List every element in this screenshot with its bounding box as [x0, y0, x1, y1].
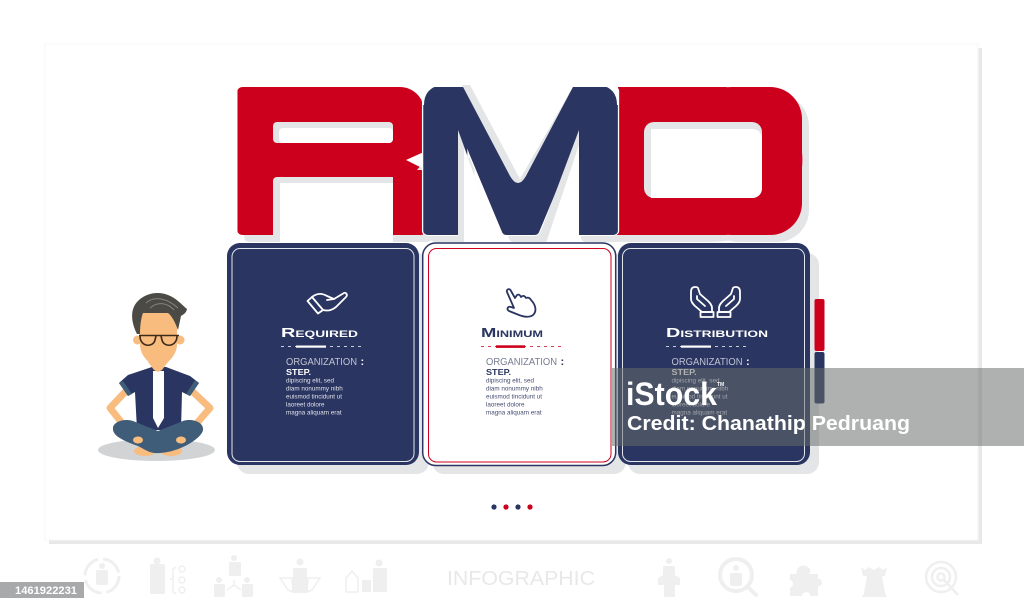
image id tag: 1461922231 — [15, 585, 77, 597]
title drop shadow: R — [231, 54, 432, 281]
watermark band — [612, 368, 1024, 446]
text block: diam nonummy nibh — [286, 386, 343, 392]
text block: STEP. — [286, 368, 311, 377]
icon: two hands — [691, 287, 740, 317]
letter R: R — [224, 47, 426, 274]
tie — [153, 371, 164, 428]
text block: dipiscing elit, sed — [672, 378, 720, 384]
text block: euismod tincidunt ut — [486, 394, 542, 400]
D inner counter — [644, 122, 762, 198]
feet — [134, 446, 156, 456]
watermark text: Credit: Chanathip Pedruang — [627, 412, 910, 435]
legs — [113, 420, 203, 453]
title drop shadow — [231, 54, 816, 282]
icon: growth — [346, 560, 387, 592]
text block: dipiscing elit, sed — [286, 378, 334, 384]
icon: person with leaves — [280, 558, 320, 593]
pagination dots — [491, 504, 533, 510]
footer label: INFOGRAPHIC — [447, 568, 595, 590]
icon: person standing — [658, 558, 680, 597]
icon: puzzle — [790, 565, 822, 596]
text block: : — [746, 356, 750, 368]
text block — [286, 356, 364, 416]
text block: euismod tincidunt ut — [286, 394, 342, 400]
text block: ORGANIZATION — [486, 356, 557, 368]
text block — [672, 356, 750, 416]
text block — [486, 356, 564, 416]
title drop shadow: M — [418, 54, 638, 281]
hands — [133, 436, 143, 444]
heading: Minimum: Minimum — [481, 325, 543, 340]
text block: diam nonummy nibh — [672, 386, 729, 392]
footer faded icons — [85, 555, 958, 597]
icon: target — [926, 562, 958, 595]
text block: STEP. — [672, 368, 696, 377]
divider — [481, 345, 561, 348]
text block: diam nonummy nibh — [486, 386, 543, 392]
watermark text: TM — [717, 382, 724, 388]
icon: team tree — [214, 555, 253, 597]
letter M: M — [411, 47, 630, 274]
text block: magna aliquam erat — [672, 410, 727, 416]
text block: STEP. — [486, 368, 511, 377]
side tabs — [814, 299, 824, 404]
neck and face — [148, 362, 168, 372]
divider — [666, 346, 746, 348]
text block: laoreet dolore — [672, 402, 711, 408]
title: RMD — [224, 47, 816, 282]
title drop shadow: D — [604, 55, 816, 282]
text block: magna aliquam erat — [286, 410, 342, 416]
icon: pointing hand — [507, 289, 535, 317]
text block: magna aliquam erat — [486, 410, 542, 416]
icon: person with options — [150, 558, 185, 594]
icon: rook — [861, 567, 887, 597]
text block: ORGANIZATION — [672, 356, 742, 368]
image id tag — [0, 582, 84, 598]
arms — [110, 391, 134, 438]
text block: laoreet dolore — [286, 402, 325, 408]
divider — [281, 346, 361, 348]
text block: laoreet dolore — [486, 402, 525, 408]
panel: Distribution — [618, 243, 810, 465]
watermark text: iStock — [626, 376, 717, 412]
letter D: D — [597, 48, 809, 275]
panel: Minimum — [423, 243, 616, 466]
illustration: seated man — [98, 293, 215, 461]
text block: ORGANIZATION — [286, 356, 357, 368]
icon: magnifier — [720, 559, 756, 595]
panel shadows — [237, 253, 819, 474]
panel: background card — [45, 44, 982, 544]
watermark text — [626, 376, 910, 435]
R inner counters — [273, 122, 426, 243]
text block: : — [360, 356, 364, 368]
text block: dipiscing elit, sed — [486, 378, 534, 384]
heading: Required: Required — [281, 325, 359, 340]
panel: Required — [227, 243, 419, 465]
letter M: M — [411, 47, 630, 274]
glasses — [139, 336, 179, 345]
M inner counters — [422, 85, 618, 243]
icon: open hand — [308, 293, 347, 314]
text block: : — [560, 356, 564, 368]
shirt — [119, 367, 199, 430]
hair — [132, 293, 187, 334]
text block: euismod tincidunt ut — [672, 394, 728, 400]
heading: Distribution: Distribution — [666, 325, 768, 340]
icon: cycle person — [85, 559, 119, 593]
